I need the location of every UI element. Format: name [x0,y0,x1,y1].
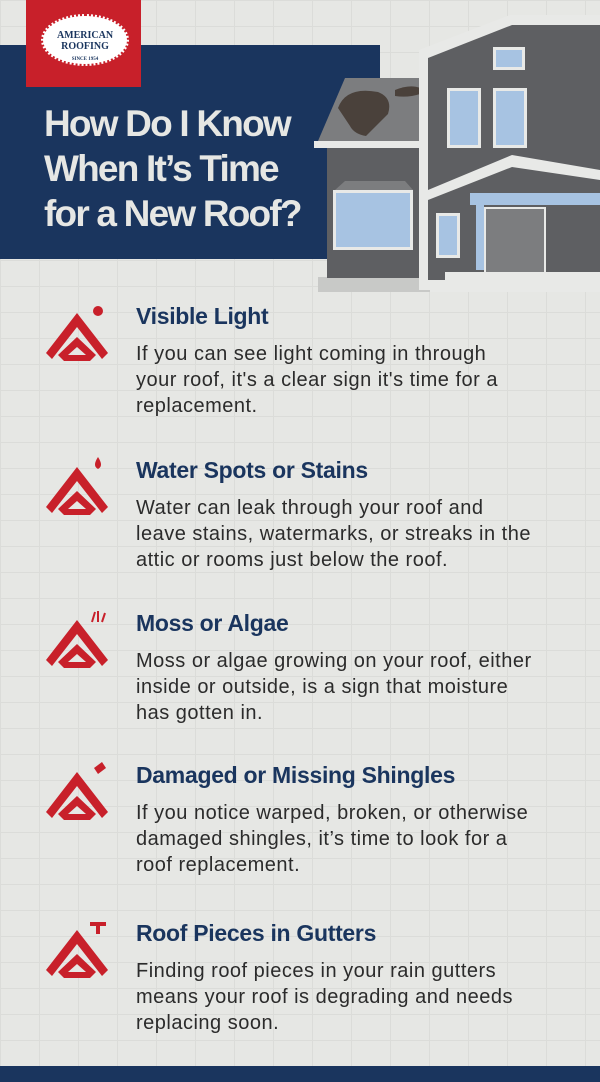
item 5: gutters: replacing soon. [136,1012,279,1034]
item 1: visible light: your roof, it's a clear sign it's time for a [136,369,498,391]
item 5: gutters [46,920,513,1034]
icon: roof with gutter [46,922,108,978]
footer bar [0,1066,600,1082]
logo: SINCE 1954 [72,57,98,62]
item 5: gutters: means your roof is degrading and needs [136,986,513,1008]
item 4: shingles [46,762,528,876]
item 1: visible light [46,303,498,417]
item 5: gutters: Roof Pieces in Gutters [136,920,376,946]
item 1: visible light: Visible Light [136,303,268,329]
logo: AMERICAN [57,30,113,41]
item 2: water spots: Water Spots or Stains [136,457,368,483]
item 4: shingles: roof replacement. [136,854,300,876]
icon: roof with shingle [46,762,108,820]
title: for a New Roof? [44,193,301,234]
title [44,103,301,234]
item 4: shingles: If you notice warped, broken, or otherwise [136,802,528,824]
item 3: moss: Moss or algae growing on your roof, either [136,650,532,672]
item 4: shingles: damaged shingles, it’s time to look for a [136,828,507,850]
item 3: moss: Moss or Algae [136,610,288,636]
icon: roof with sun [46,306,108,361]
item 3: moss: inside or outside, is a sign that moisture [136,676,508,698]
icon: roof with drop [46,457,108,515]
item 3: moss [46,610,532,724]
banner [0,45,380,259]
logo [26,0,141,87]
item 2: water spots: attic or rooms just below the roof. [136,549,448,571]
logo: ROOFING [61,41,109,52]
item 3: moss: has gotten in. [136,702,263,724]
item 1: visible light: If you can see light coming in through [136,343,486,365]
house illustration [314,15,600,292]
icon: roof with moss [46,611,108,668]
item 2: water spots: leave stains, watermarks, or streaks in the [136,523,531,545]
item 2: water spots: Water can leak through your roof and [136,497,483,519]
item 5: gutters: Finding roof pieces in your rain gutters [136,960,496,982]
item 1: visible light: replacement. [136,395,258,417]
item 4: shingles: Damaged or Missing Shingles [136,762,455,788]
title: How Do I Know [44,103,290,144]
item 2: water spots [46,457,531,571]
title: When It’s Time [44,148,278,189]
